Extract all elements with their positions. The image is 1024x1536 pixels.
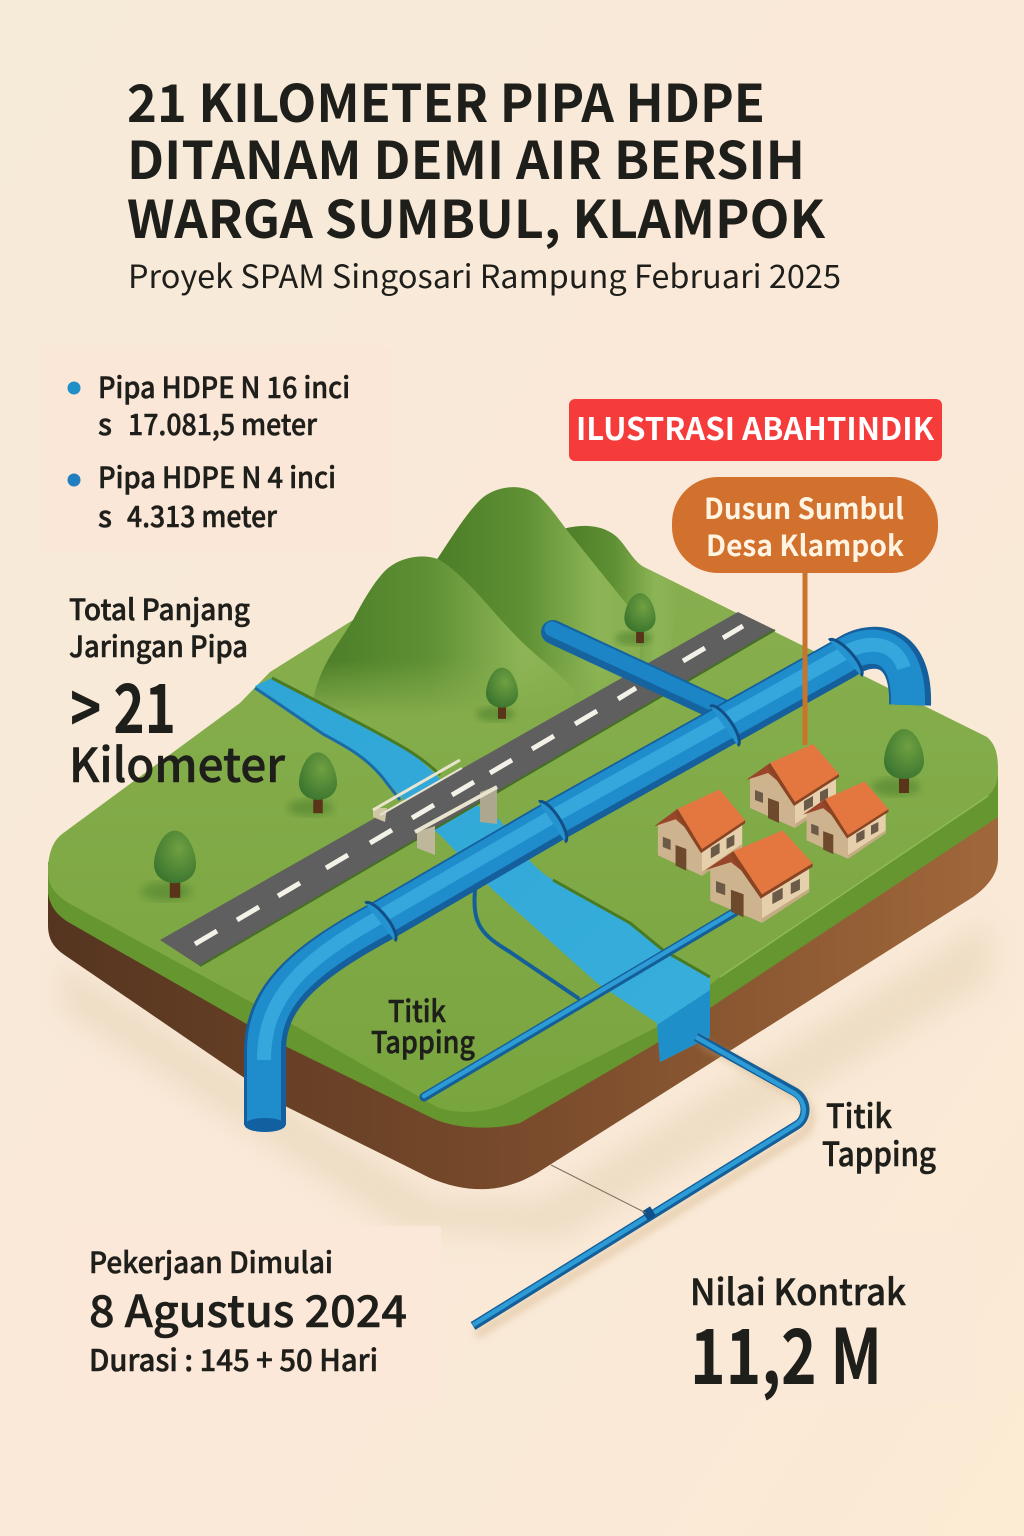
panel: work schedule: Pekerjaan Dimulai xyxy=(89,1240,333,1282)
title xyxy=(127,62,825,253)
panel: work schedule: Durasi : 145 + 50 Hari xyxy=(89,1336,378,1380)
tree: front left xyxy=(141,831,196,901)
title: WARGA SUMBUL, KLAMPOK xyxy=(127,178,825,253)
hill: middle xyxy=(430,487,640,720)
house: right xyxy=(803,781,888,859)
pipe collars xyxy=(365,635,867,941)
label: illustration credit xyxy=(569,399,942,461)
tree: right corner xyxy=(872,729,924,796)
bullet: 4 inch pipe xyxy=(68,474,80,486)
village houses xyxy=(654,744,888,923)
spec: 4 inch pipe: Pipa HDPE N 4 inci xyxy=(98,455,336,497)
label: illustration credit: ILUSTRASI ABAHTINDIK xyxy=(576,404,935,449)
title: 21 KILOMETER PIPA HDPE xyxy=(127,62,765,137)
ground shadow xyxy=(60,920,990,1240)
label: tapping point on land xyxy=(371,987,475,1062)
spec: 4 inch pipe xyxy=(98,455,336,536)
stat: total pipe length: Total Panjang xyxy=(69,587,250,629)
panel: contract value xyxy=(655,1232,975,1406)
title: DITANAM DEMI AIR BERSIH xyxy=(127,119,805,194)
road dashes xyxy=(195,626,743,944)
label: tapping point on land: Titik xyxy=(388,987,446,1031)
label: tapping point outside: Tapping xyxy=(822,1128,936,1176)
house: left xyxy=(654,789,745,876)
hill: right xyxy=(566,526,660,660)
grass top surface xyxy=(48,560,998,1112)
house: back xyxy=(746,744,839,828)
tree: by the river xyxy=(288,752,337,816)
panel: contract value: Nilai Kontrak xyxy=(690,1264,906,1316)
label: tapping point outside: Titik xyxy=(826,1090,892,1138)
soil side xyxy=(48,790,998,1189)
stat: total pipe length: Kilometer xyxy=(69,727,286,796)
river xyxy=(255,678,710,1062)
panel: work schedule xyxy=(56,1226,441,1402)
grass lip xyxy=(48,775,998,1128)
branch pipe xyxy=(552,629,725,712)
pipe end cap xyxy=(244,1118,286,1132)
callout: village xyxy=(672,477,938,745)
spec: 16 inch pipe: s xyxy=(98,402,112,444)
hills xyxy=(314,487,660,706)
subtitle: Proyek SPAM Singosari Rampung Februari 2025 xyxy=(128,252,841,298)
spec: 16 inch pipe xyxy=(98,365,350,444)
spec: 4 inch pipe: s xyxy=(98,494,112,536)
bullet: 16 inch pipe xyxy=(68,382,80,394)
label: tapping point on land: Tapping xyxy=(371,1018,475,1062)
tree: behind road xyxy=(615,593,656,645)
lower tapping pipe xyxy=(473,1037,810,1335)
callout: village: Dusun Sumbul xyxy=(704,486,904,528)
panel: contract value: 11,2 M xyxy=(690,1296,882,1406)
label: tapping point outside xyxy=(822,1090,936,1176)
trees xyxy=(141,593,924,901)
spec: 16 inch pipe: Pipa HDPE N 16 inci xyxy=(98,365,350,407)
panel: work schedule: 8 Agustus 2024 xyxy=(89,1276,407,1340)
spec: 4 inch pipe: 4.313 meter xyxy=(127,494,277,536)
bridge xyxy=(373,760,497,855)
stat: total pipe length: > 21 xyxy=(70,654,176,753)
leader line to tapping pipe xyxy=(551,1165,646,1213)
road xyxy=(160,612,775,966)
main HDPE pipe xyxy=(244,635,910,1132)
panel: pipe specifications xyxy=(40,345,392,553)
spec: 16 inch pipe: 17.081,5 meter xyxy=(128,402,317,444)
tree: below hills xyxy=(476,668,518,721)
thin tapping pipes xyxy=(424,890,735,1097)
hill: left xyxy=(314,556,568,706)
stat: total pipe length xyxy=(69,587,286,796)
house: front xyxy=(706,830,813,923)
isometric land platform xyxy=(48,560,998,1189)
stat: total pipe length: Jaringan Pipa xyxy=(69,624,248,666)
callout: village: Desa Klampok xyxy=(706,523,904,565)
